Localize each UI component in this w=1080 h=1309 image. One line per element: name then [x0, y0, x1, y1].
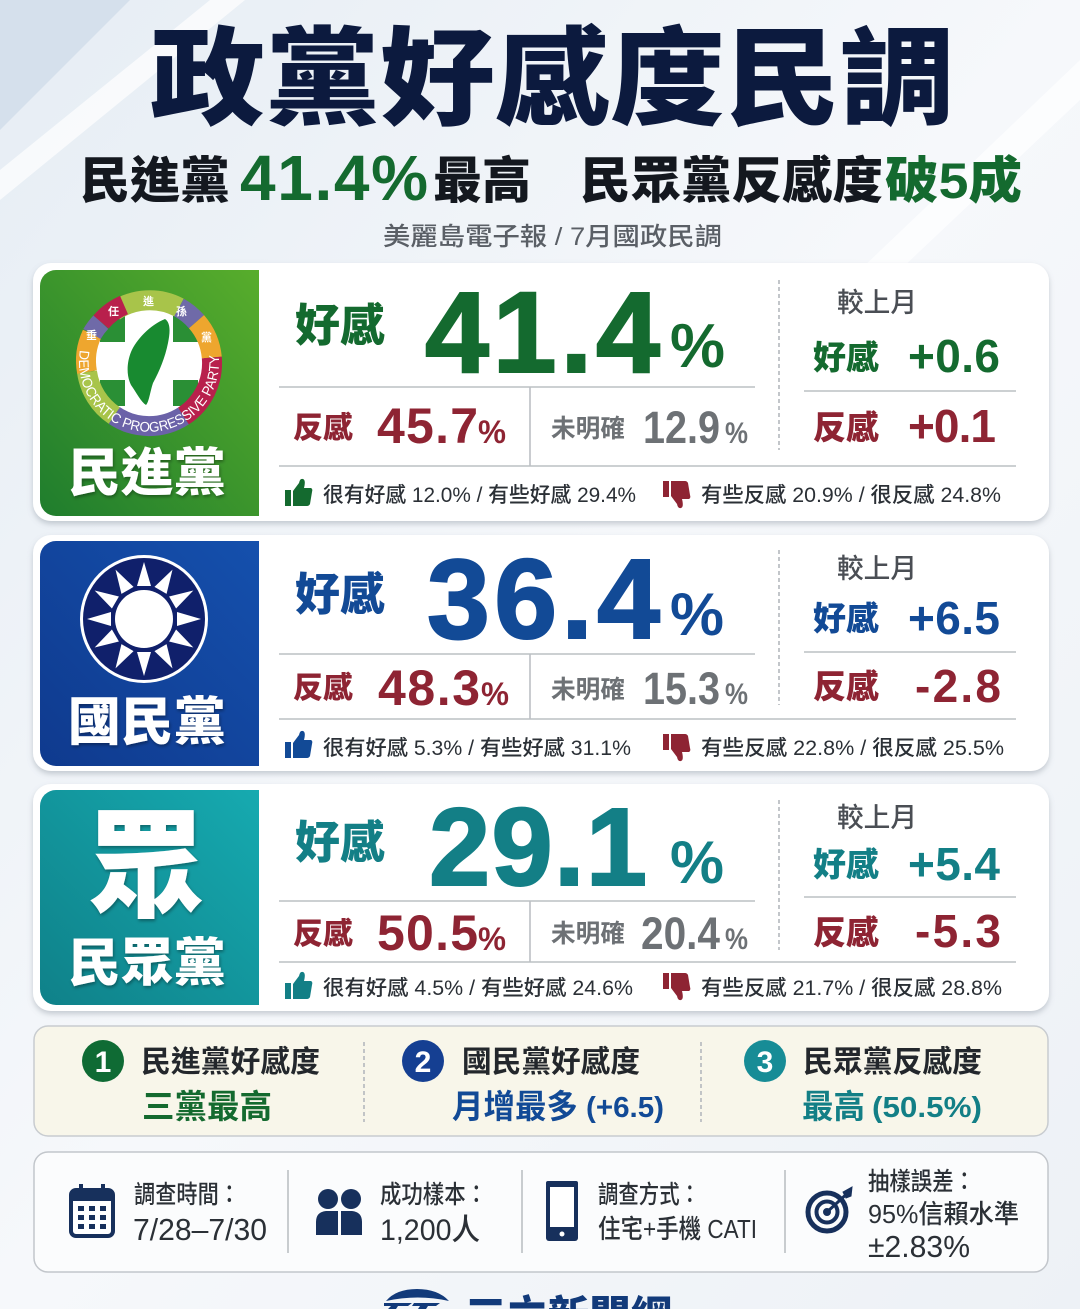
finding 2: 2	[415, 1046, 431, 1079]
finding 3: (50.5%)	[872, 1092, 982, 1124]
finding 1: 三黨最高	[142, 1088, 272, 1125]
icon: thumb down	[663, 734, 690, 761]
finding 2	[402, 1040, 664, 1125]
sampling error	[868, 1168, 1019, 1264]
sampling error: 抽樣誤差：	[868, 1168, 975, 1196]
footer logo	[384, 1289, 672, 1309]
panel: DPP card: %	[725, 417, 748, 450]
party name: 民進黨	[68, 445, 226, 503]
panel: TPP card: 反感	[813, 914, 879, 951]
finding 3: 最高	[802, 1088, 865, 1125]
subtitle: 41.4%	[240, 142, 428, 214]
detail favorable: 很有好感 4.5% / 有些好感 24.6%	[323, 977, 633, 1000]
sample size: 1,200人	[380, 1214, 480, 1247]
panel: TPP card: +5.4	[908, 838, 1000, 890]
panel: KMT card: +6.5	[908, 592, 1000, 644]
subtitle: 最高	[433, 153, 531, 209]
panel: DPP card: +0.1	[908, 400, 996, 452]
subtitle: 破5成	[885, 153, 1022, 209]
detail unfavorable: 有些反感 22.8% / 很反感 25.5%	[701, 737, 1004, 760]
sampling error: ±2.83%	[868, 1229, 970, 1264]
subtitle: 民進黨	[80, 153, 230, 209]
panel: TPP card: 29.1	[429, 786, 647, 909]
survey dates: 調查時間：	[134, 1181, 240, 1209]
panel: DPP card: %	[478, 414, 506, 450]
subtitle	[80, 142, 1022, 214]
icon: DPP emblem: 黨	[201, 330, 212, 344]
panel: DPP card: 好感	[813, 339, 879, 376]
panel: KMT card: %	[481, 676, 509, 712]
sample size: 成功樣本：	[380, 1181, 487, 1209]
icon: KMT emblem	[80, 555, 208, 683]
icon: DPP emblem: 進	[143, 294, 154, 308]
icon: TPP emblem character: 眾	[88, 802, 204, 934]
icon: DPP emblem: DEMOCRATIC PROGRESSIVE PARTY	[78, 351, 219, 432]
sample size	[380, 1181, 487, 1247]
unfavorable: 反感	[293, 671, 353, 705]
favorable: 好感	[295, 817, 385, 868]
finding 3: 民眾黨反感度	[803, 1045, 982, 1079]
subtitle: 民眾黨反感度	[580, 153, 883, 209]
survey dates	[133, 1181, 267, 1247]
undecided: 未明確	[551, 676, 625, 704]
sampling error: 95%信賴水準	[868, 1199, 1019, 1229]
panel: TPP card: %	[725, 923, 748, 956]
icon: target	[808, 1187, 852, 1231]
survey method: 調查方式：	[598, 1181, 700, 1209]
panel: DPP card: 12.9	[643, 402, 720, 453]
icon: DPP emblem	[76, 290, 222, 436]
monthly change: 較上月	[837, 803, 917, 833]
title: 政黨好感度民調	[150, 19, 955, 139]
survey method	[598, 1181, 757, 1244]
icon: thumb up	[285, 731, 312, 758]
detail unfavorable: 有些反感 20.9% / 很反感 24.8%	[701, 484, 1001, 507]
icon: thumb up	[285, 479, 312, 506]
panel: key findings	[34, 1026, 1048, 1136]
favorable: 好感	[295, 569, 385, 620]
panel: KMT card: 好感	[813, 600, 879, 637]
unfavorable: 反感	[293, 411, 353, 445]
icon: DPP emblem: 孫	[176, 304, 187, 318]
panel: DPP card: 反感	[813, 409, 879, 446]
panel: TPP card: 20.4	[641, 908, 720, 959]
icon: DPP emblem: 垂	[86, 328, 97, 342]
panel: DPP card: 41.4	[425, 269, 660, 397]
icon: thumb down	[663, 481, 690, 508]
panel: KMT card	[33, 535, 1049, 771]
panel: TPP card: 50.5	[377, 905, 478, 961]
monthly change: 較上月	[837, 288, 917, 318]
source line: 美麗島電子報 / 7月國政民調	[383, 223, 722, 251]
finding 1: 1	[95, 1046, 111, 1079]
survey dates: 7/28–7/30	[133, 1212, 267, 1247]
detail favorable: 很有好感 12.0% / 有些好感 29.4%	[323, 484, 636, 507]
panel: DPP card: %	[670, 312, 725, 381]
undecided: 未明確	[551, 920, 625, 948]
panel: DPP card: 45.7	[377, 398, 478, 454]
icon: thumb down	[663, 973, 690, 1000]
panel: TPP card: %	[670, 829, 724, 896]
detail favorable: 很有好感 5.3% / 有些好感 31.1%	[323, 737, 631, 760]
finding 2: 月增最多	[452, 1088, 578, 1125]
favorable: 好感	[295, 300, 385, 351]
finding 2: 國民黨好感度	[462, 1045, 640, 1079]
panel: survey info	[34, 1152, 1048, 1272]
panel: TPP card	[33, 784, 1049, 1011]
icon: calendar	[71, 1184, 113, 1236]
panel: KMT card: 36.4	[427, 536, 660, 662]
icon: DPP emblem: 任	[108, 304, 119, 318]
panel: TPP card: -5.3	[915, 905, 1001, 957]
unfavorable: 反感	[293, 917, 353, 951]
panel: KMT card: 15.3	[643, 663, 720, 714]
panel: TPP card: 好感	[813, 846, 879, 883]
monthly change: 較上月	[837, 554, 917, 584]
survey method: 住宅+手機 CATI	[598, 1214, 757, 1244]
finding 1: 民進黨好感度	[141, 1045, 320, 1079]
finding 3	[744, 1040, 982, 1125]
finding 3: 3	[757, 1046, 773, 1079]
panel: DPP card	[30, 263, 1052, 527]
party name: 國民黨	[68, 694, 226, 752]
party name: 民眾黨	[68, 935, 226, 993]
panel: TPP card: %	[478, 921, 506, 957]
icon: phone	[546, 1181, 578, 1241]
icon: thumb up	[285, 972, 312, 999]
panel: KMT card: 48.3	[378, 660, 480, 716]
panel: KMT card: %	[725, 678, 748, 711]
panel: DPP card: +0.6	[908, 330, 1000, 382]
icon: people	[316, 1189, 362, 1235]
undecided: 未明確	[551, 415, 625, 443]
panel: KMT card: 反感	[813, 668, 879, 705]
finding 1	[82, 1040, 320, 1125]
detail unfavorable: 有些反感 21.7% / 很反感 28.8%	[701, 977, 1002, 1000]
panel: KMT card: -2.8	[915, 660, 1001, 712]
finding 2: (+6.5)	[586, 1092, 664, 1124]
panel: KMT card: %	[670, 581, 724, 648]
